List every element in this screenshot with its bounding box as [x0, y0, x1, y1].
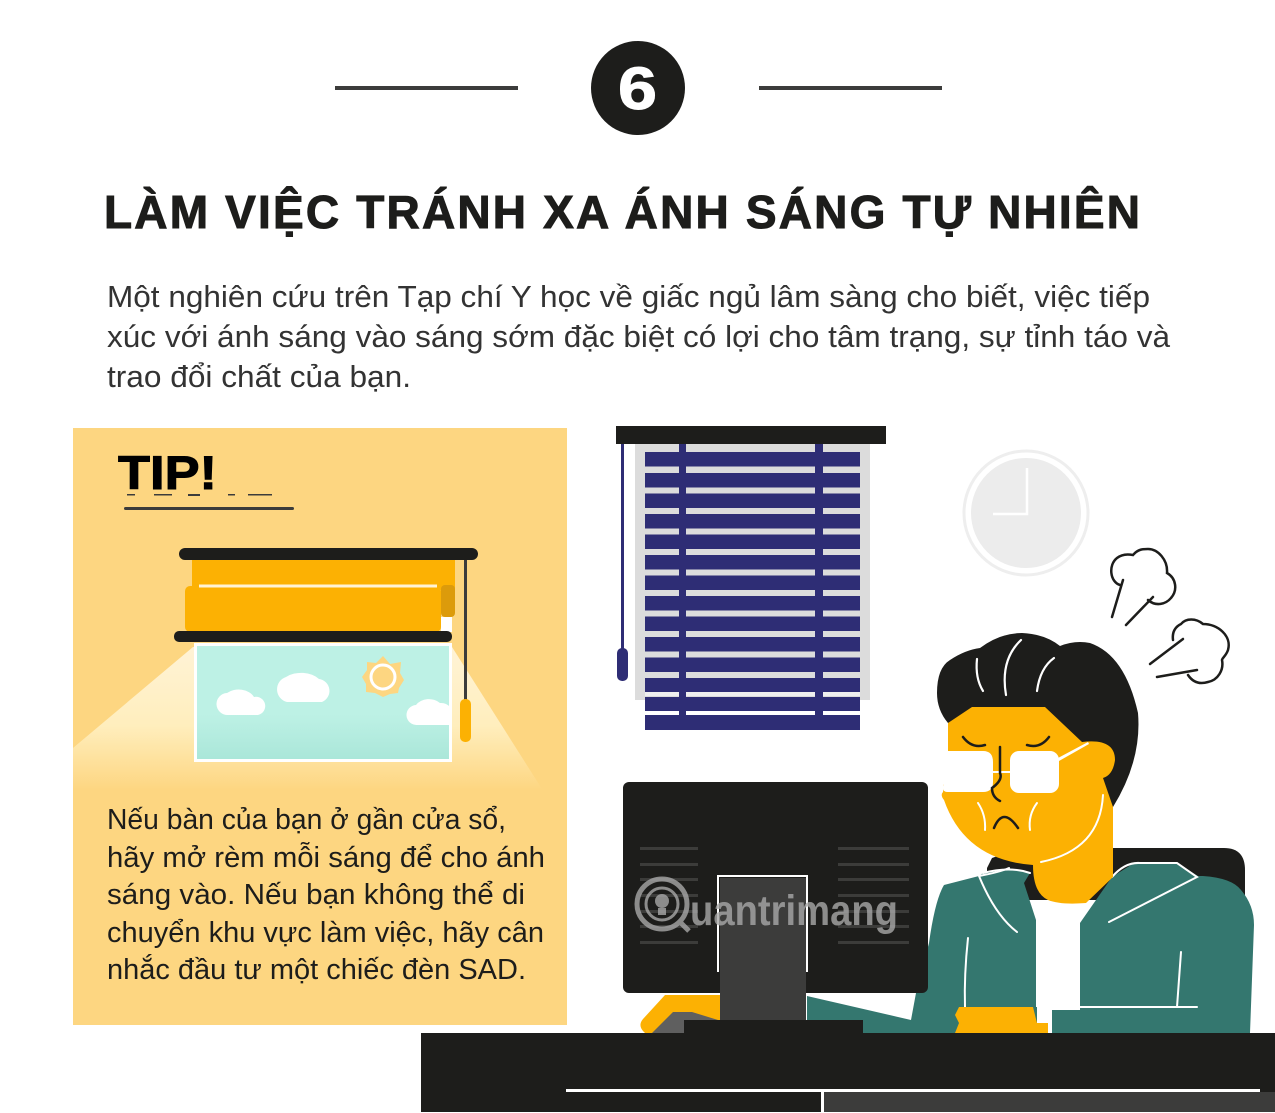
cuff and hand: [955, 1007, 1048, 1033]
watermark: Quantrimang: uantrimang: [690, 887, 898, 935]
hand on mouse: [640, 995, 720, 1033]
icon: window blinds: [616, 426, 886, 730]
intro paragraph: Một nghiên cứu trên Tạp chí Y học về giấc ngủ lâm sàng cho biết, việc tiếp: [107, 279, 1150, 314]
tip text: sáng vào. Nếu bạn không thể di: [107, 879, 525, 911]
clouds: [216, 673, 450, 725]
glasses: [943, 742, 1089, 793]
intro paragraph: [107, 279, 1171, 394]
intro paragraph: trao đổi chất của bạn.: [107, 359, 411, 394]
icon: wall clock: [964, 451, 1088, 575]
tip heading: TIP!: [118, 446, 217, 499]
facial features: [963, 737, 1049, 828]
tip text: nhắc đầu tư một chiếc đèn SAD.: [107, 953, 526, 986]
desk: [421, 1033, 1275, 1112]
sun: [362, 656, 404, 697]
tip text: [107, 804, 545, 986]
tip text: hãy mở rèm mỗi sáng để cho ánh: [107, 841, 545, 874]
tip text: Nếu bàn của bạn ở gần cửa sổ,: [107, 804, 506, 836]
intro paragraph: xúc với ánh sáng vào sáng sớm đặc biệt có lợi cho tâm trạng, sự tỉnh táo và: [107, 319, 1171, 354]
number badge header: [335, 41, 942, 135]
number badge header: 6: [618, 55, 657, 122]
tip text: chuyển khu vực làm việc, hãy cân: [107, 917, 544, 949]
chair: [987, 848, 1245, 900]
face: [942, 707, 1115, 904]
hair highlights: [977, 640, 1054, 695]
watermark: Quantrimang: [637, 879, 898, 935]
icon: steam puffs: [1111, 549, 1229, 683]
icon: roller blind window: [174, 548, 478, 760]
title: LÀM VIỆC TRÁNH XA ÁNH SÁNG TỰ NHIÊN: [104, 186, 1140, 238]
jacket: [807, 863, 1254, 1033]
hair: [937, 633, 1138, 807]
computer monitor: [623, 782, 928, 1034]
tip heading: [118, 446, 294, 510]
character: office worker: [807, 633, 1254, 1033]
light cone: [73, 647, 542, 790]
panel: tip: [73, 428, 567, 1025]
